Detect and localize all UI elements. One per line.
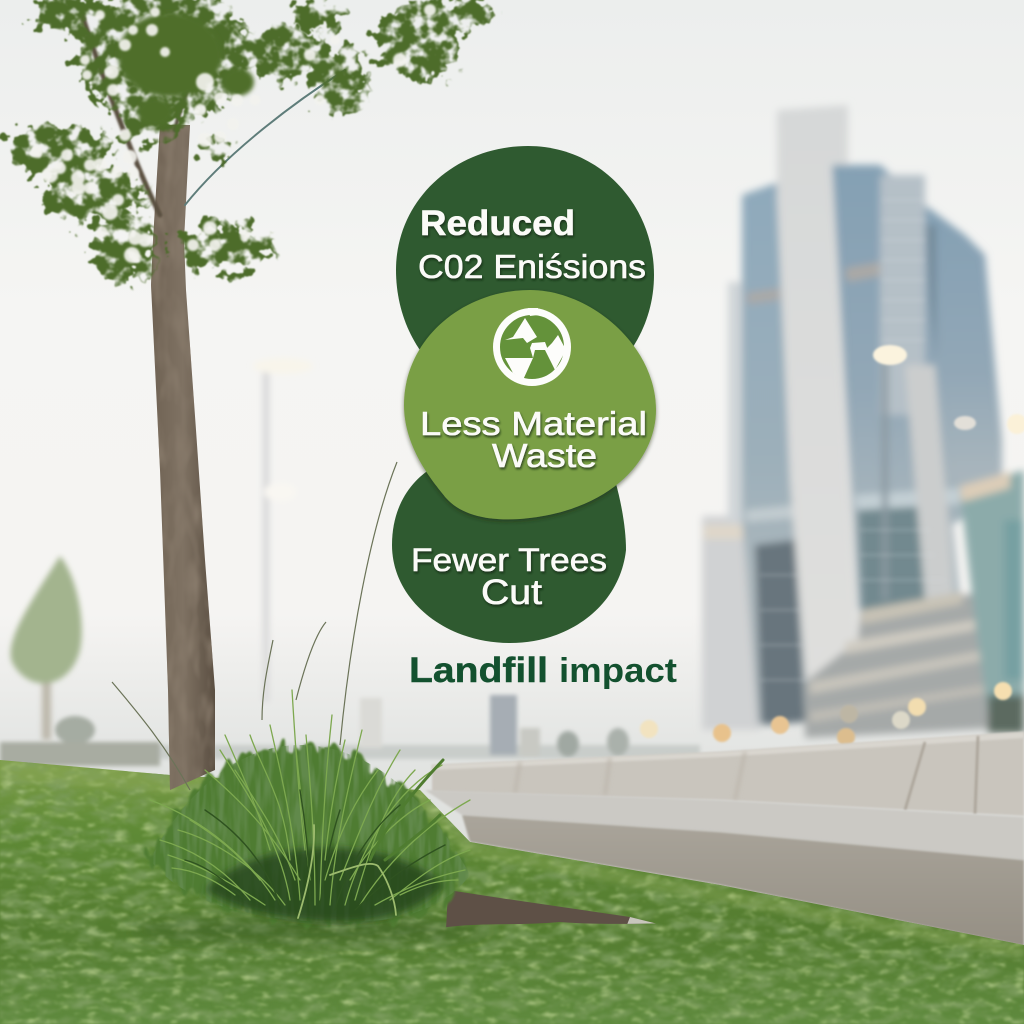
panel: less material waste [404,290,656,519]
title: landfill impact: impact [559,652,677,690]
foliage masses [6,0,495,284]
text: CO2 emissions: C02 Eniśsions [418,248,646,285]
central pale pillar [777,105,858,682]
pavement top [425,790,1024,860]
right glass [832,165,960,610]
pale slab [905,365,955,600]
blurred distant skyline [0,695,700,766]
low left building [702,516,760,730]
tree canopy [6,0,495,284]
grass lawn [0,755,1024,1024]
icon: recycling symbol [496,308,568,382]
tall seed stems [112,462,397,790]
front face [462,815,1024,946]
tree trunk [151,125,215,790]
text: less material: Less Material [420,405,647,442]
left glass [742,180,810,725]
bokeh highlights [31,4,436,263]
text: cut: Cut [481,573,542,612]
right side building [960,470,1024,730]
panel: fewer trees cut [392,468,626,643]
bokeh lights [640,345,1024,746]
heading: reduced: Reduced [420,204,575,243]
branches [82,15,345,215]
panel: reduced CO2 emissions [396,146,654,405]
podium [805,592,1000,738]
blurred small tree [11,556,82,740]
back wall [432,732,1024,816]
grass tuft [112,462,470,925]
facade floor lines [760,200,945,680]
far right glass [925,205,1002,540]
text: waste: Waste [492,437,597,474]
blurred office tower [702,105,1024,738]
concrete curb and pavement [425,732,1024,946]
text: fewer trees: Fewer Trees [411,542,607,578]
brick edging in the grass [446,891,656,928]
grass blades [150,690,470,905]
blurred street lamp [253,358,313,702]
infographic stack [392,146,677,690]
title: landfill impact: Landfill [409,651,548,690]
title: landfill impact [409,651,677,690]
